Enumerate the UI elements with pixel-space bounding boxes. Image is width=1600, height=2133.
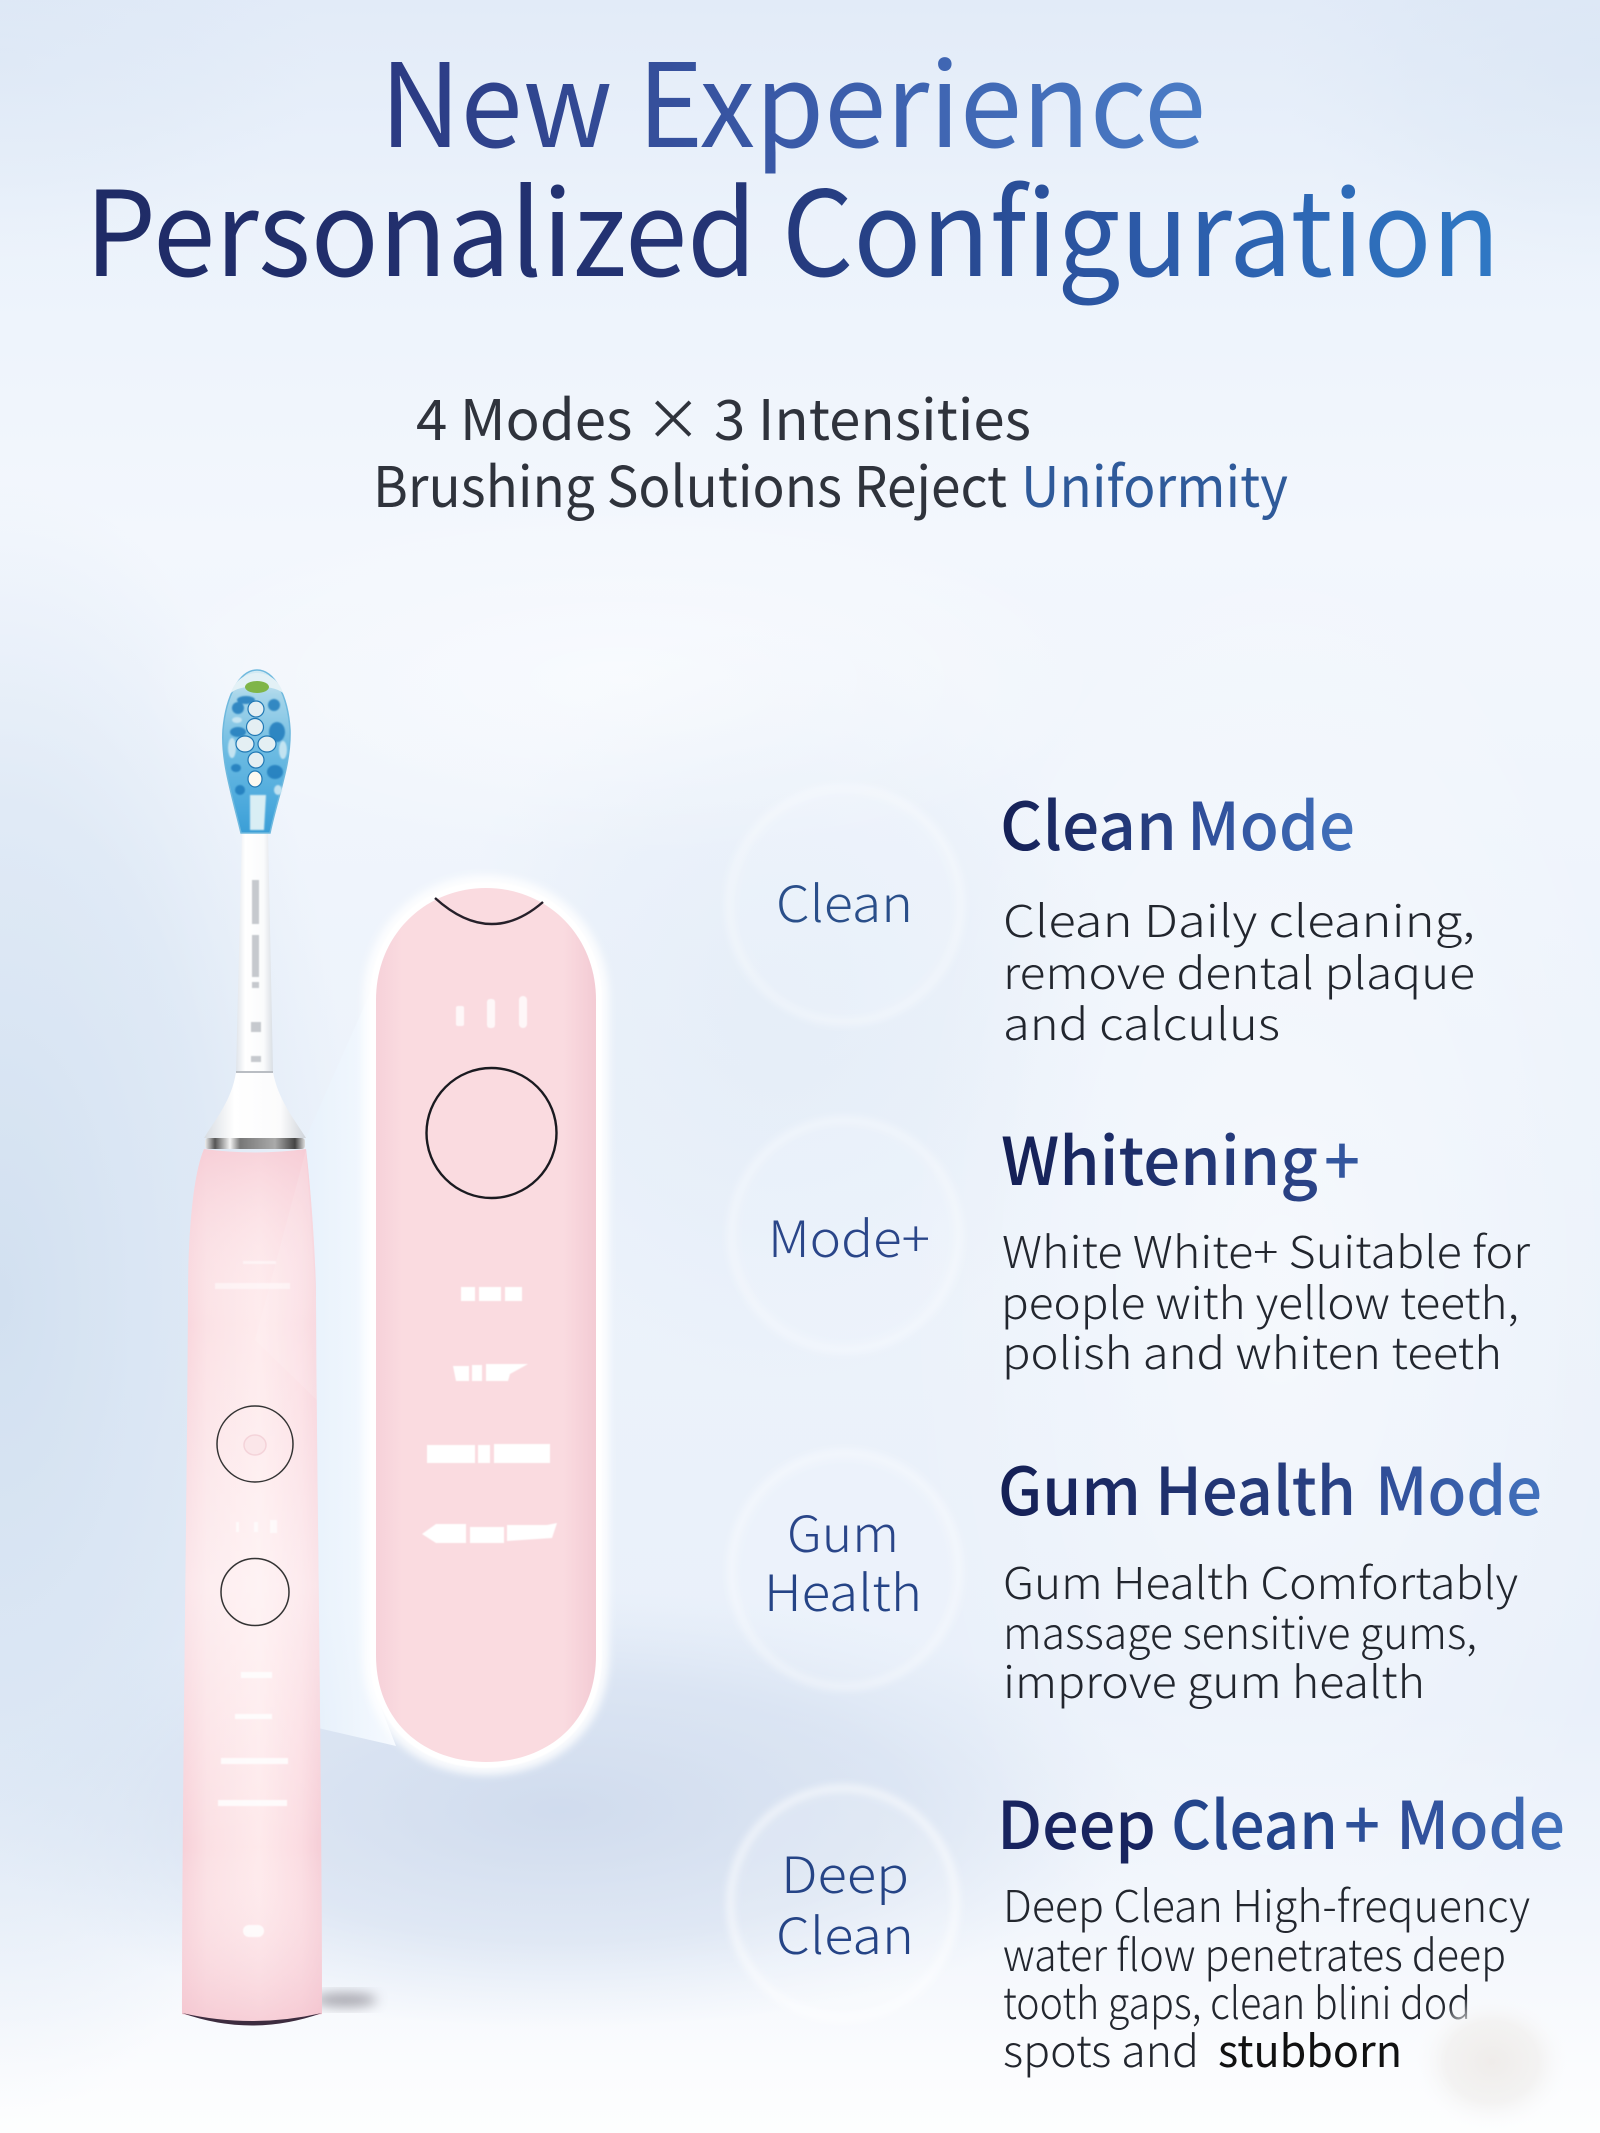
mode block: Clean: Clean Daily cleaning,	[1003, 886, 1475, 950]
neck print	[251, 880, 261, 1062]
mode block: Whitening+: White White+ Suitable for	[1002, 1217, 1530, 1281]
brush neck	[236, 830, 273, 1072]
mode circle: Deep Clean: Deep	[781, 1836, 909, 1908]
mode block: Gum Health: Gum Health	[998, 1439, 1356, 1535]
mode circle: Gum Health: Health	[764, 1554, 922, 1626]
toothbrush	[182, 670, 377, 2026]
mode block: Gum Health: Gum Health Comfortably	[1003, 1548, 1518, 1612]
mode circle: Deep Clean	[730, 1788, 956, 2018]
base shadow	[313, 1993, 377, 2007]
mode block: Whitening+: Whitening	[1001, 1109, 1318, 1205]
mode block: Whitening+: +	[1324, 1109, 1360, 1205]
mode block: Clean	[1000, 774, 1475, 1053]
title	[85, 13, 1500, 310]
mode block: Deep Clean+: tooth gaps, clean blini dod	[1003, 1968, 1471, 2032]
mode block: Clean: remove dental plaque	[1003, 938, 1475, 1002]
mode circle: Clean: Clean	[776, 865, 913, 937]
mode block: Clean: Clean	[1000, 774, 1177, 870]
mode block: Deep Clean+: +	[1344, 1773, 1380, 1869]
intensity dots	[236, 1520, 277, 1533]
subtitle: Uniformity	[1021, 443, 1288, 524]
handle button top	[217, 1406, 293, 1482]
mode circle: Mode+	[731, 1120, 959, 1350]
mode block: Deep Clean+	[997, 1773, 1570, 2130]
mode block: Deep Clean+: Deep Clean High-frequency	[1003, 1871, 1530, 1935]
mode circle: Gum Health: Gum	[787, 1495, 899, 1567]
handle mode labels	[218, 1672, 288, 1937]
panel top arc	[435, 898, 543, 924]
mode block: Gum Health: massage sensitive gums,	[1003, 1598, 1477, 1662]
panel button	[426, 1068, 556, 1198]
smudge	[1414, 1994, 1570, 2130]
base ring	[182, 2013, 322, 2026]
mode block: Deep Clean+: spots and	[1003, 2016, 1199, 2080]
mode circle: Mode+: Mode+	[768, 1200, 930, 1272]
title: New Experience	[380, 13, 1206, 181]
brush head	[223, 670, 290, 833]
subtitle: Brushing Solutions Reject	[373, 443, 1007, 524]
mode block: Deep Clean+: Mode	[1396, 1773, 1565, 1869]
mode block: Whitening+	[1001, 1109, 1530, 1382]
panel LEDs	[456, 996, 527, 1028]
metal ring	[205, 1138, 305, 1149]
mode circle: Clean	[729, 788, 961, 1022]
mode block: Clean: and calculus	[1003, 989, 1280, 1053]
mode circle: Deep Clean: Clean	[776, 1897, 914, 1969]
mode block: Gum Health: Mode	[1375, 1439, 1542, 1535]
handle logo marks	[215, 1261, 290, 1289]
zoomed control panel	[376, 888, 596, 1762]
callout beam	[305, 975, 396, 1746]
title: Personalized Configuration	[85, 139, 1500, 310]
neck flare	[204, 1072, 306, 1138]
panel mode labels	[422, 1287, 557, 1543]
handle body	[182, 1149, 322, 2026]
mode block: Deep Clean+: Deep	[997, 1773, 1156, 1869]
mode block: Whitening+: people with yellow teeth,	[1001, 1268, 1519, 1332]
mode block: Deep Clean+: water flow penetrates deep	[1003, 1920, 1506, 1984]
mode block: Whitening+: polish and whiten teeth	[1002, 1318, 1502, 1382]
subtitle	[373, 376, 1288, 524]
mode block: Clean: Mode	[1187, 774, 1355, 870]
handle button bottom	[221, 1558, 289, 1626]
mode block: Gum Health: improve gum health	[1003, 1647, 1425, 1711]
subtitle: 4 Modes × 3 Intensities	[416, 376, 1031, 457]
mode block: Gum Health	[998, 1439, 1542, 1711]
mode block: Deep Clean+: stubborn	[1218, 2016, 1402, 2080]
mode circle: Gum Health	[731, 1453, 959, 1687]
mode block: Deep Clean+: Clean	[1171, 1773, 1338, 1869]
